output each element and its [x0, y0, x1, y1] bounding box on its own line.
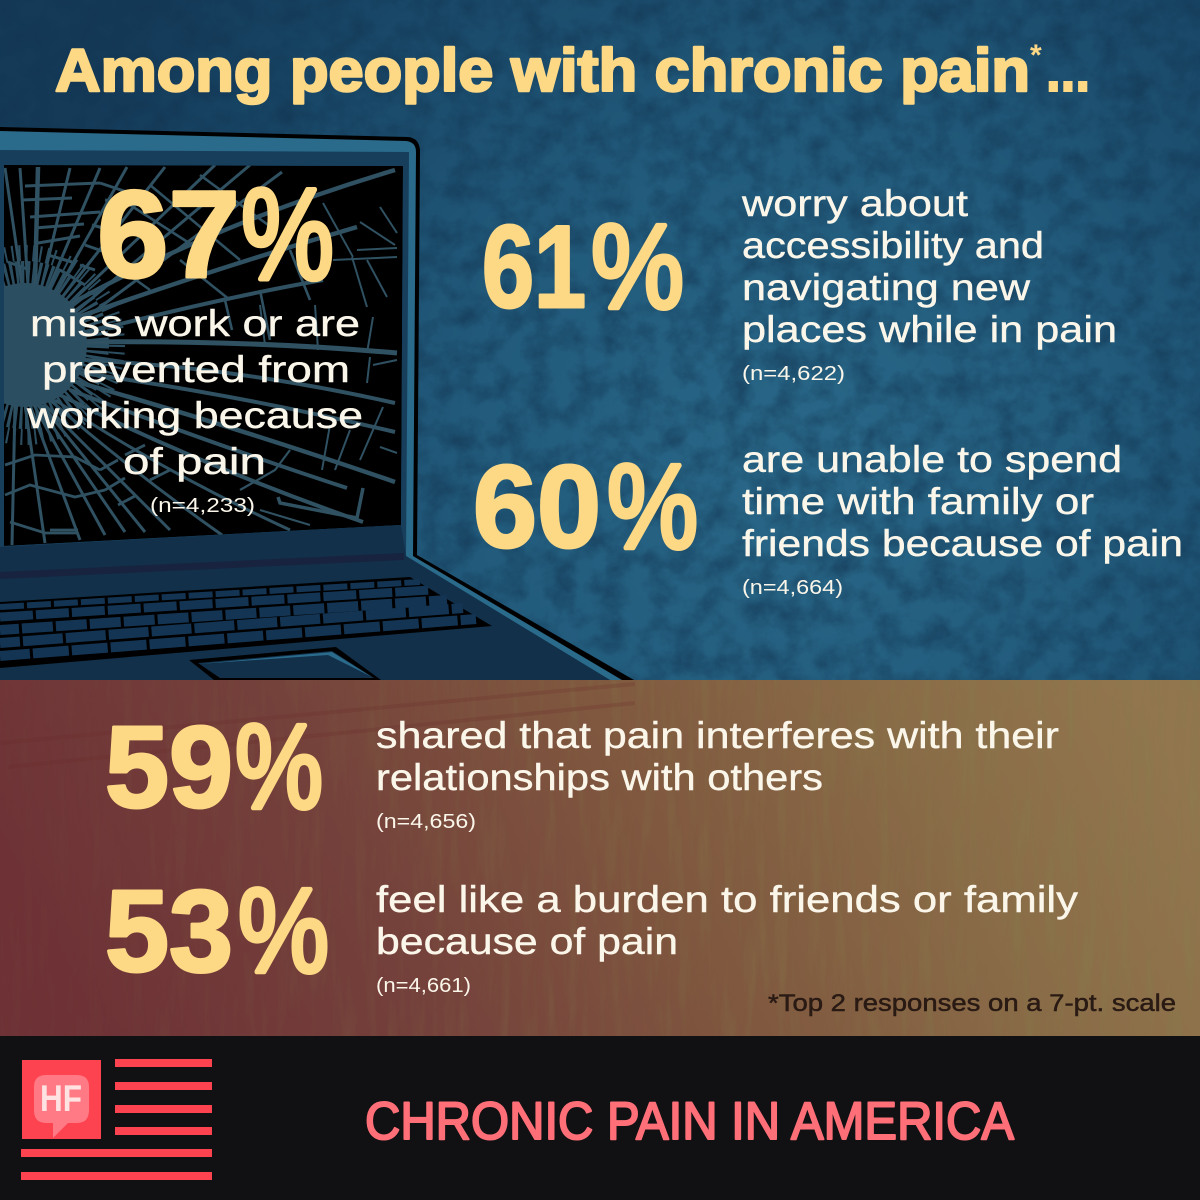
title: ... — [1046, 37, 1090, 104]
panel: footer — [0, 1036, 1200, 1200]
stat: 53% burden: (n=4,661) — [376, 975, 471, 997]
radial cracks, right — [60, 170, 395, 310]
stat: 59% relationships: shared that pain interferes with their — [376, 715, 1059, 756]
stat: 60% family time: friends because of pain — [742, 523, 1183, 564]
stat: 53% burden: feel like a burden to friends or family — [376, 879, 1079, 920]
stat: 59% relationships — [105, 700, 1059, 834]
icon: HF flag logo: HF — [40, 1078, 82, 1119]
radial cracks, bottom — [45, 405, 170, 530]
stat: 61% accessibility: accessibility and — [742, 225, 1044, 266]
stat: 67% miss work: (n=4,233) — [150, 495, 255, 517]
crack impact point — [0, 253, 117, 437]
stat: 61% accessibility: worry about — [741, 183, 969, 224]
stat: 67% miss work: prevented from — [42, 349, 350, 390]
cracked screen — [0, 165, 403, 546]
stat: 60% family time: time with family or — [742, 481, 1094, 522]
stat: 67% miss work — [26, 161, 363, 517]
stat: 60% family time: 60 — [473, 441, 601, 572]
stat: 59% relationships: relationships with others — [376, 757, 823, 798]
stat: 60% family time: % — [607, 440, 698, 574]
stat: 61% accessibility: % — [591, 200, 684, 334]
stat: 67% miss work: % — [241, 161, 334, 307]
stat: 53% burden — [105, 864, 1079, 998]
stat: 61% accessibility: places while in pain — [742, 309, 1117, 350]
laptop base — [0, 525, 610, 680]
web, top centre — [115, 175, 310, 340]
stat: 60% family time: are unable to spend — [742, 439, 1122, 480]
illustration: laptop with cracked screen — [0, 127, 634, 680]
ladder rungs, top left — [22, 183, 140, 252]
stat: 59% relationships: 59 — [105, 702, 233, 832]
ladder rungs, bottom left — [5, 445, 170, 533]
stat: 60% family time — [473, 439, 1183, 599]
stat: 59% relationships: (n=4,656) — [376, 811, 476, 833]
stat: 53% burden: % — [238, 864, 329, 998]
stat: 59% relationships: % — [235, 700, 323, 834]
icon: HF flag logo — [21, 1059, 212, 1180]
stat: 67% miss work: 67 — [97, 166, 240, 304]
panel: rust textured band — [0, 680, 1200, 1036]
stat: 61% accessibility: navigating new — [742, 267, 1030, 308]
sparse cracks, right — [260, 203, 397, 470]
stat: 61% accessibility — [482, 183, 1117, 385]
title: Among people with chronic pain — [55, 37, 1030, 104]
stat: 67% miss work: miss work or are — [30, 303, 360, 344]
trackpad — [189, 647, 381, 680]
footer title: CHRONIC PAIN IN AMERICA — [365, 1092, 1015, 1151]
title: * — [1030, 39, 1042, 72]
panel: blue textured background — [0, 0, 1200, 680]
stat: 67% miss work: working because — [26, 395, 363, 436]
stat: 61% accessibility: 61 — [482, 201, 586, 332]
stat: 60% family time: (n=4,664) — [742, 577, 843, 599]
laptop lid and bezel — [0, 127, 634, 680]
stat: 61% accessibility: (n=4,622) — [742, 363, 845, 385]
stat: 67% miss work: of pain — [123, 441, 266, 482]
stat: 53% burden: because of pain — [376, 921, 678, 962]
radial cracks, top — [5, 168, 22, 285]
footnote: *Top 2 responses on a 7-pt. scale — [768, 990, 1176, 1017]
stat: 53% burden: 53 — [105, 866, 233, 996]
keyboard — [0, 577, 492, 668]
